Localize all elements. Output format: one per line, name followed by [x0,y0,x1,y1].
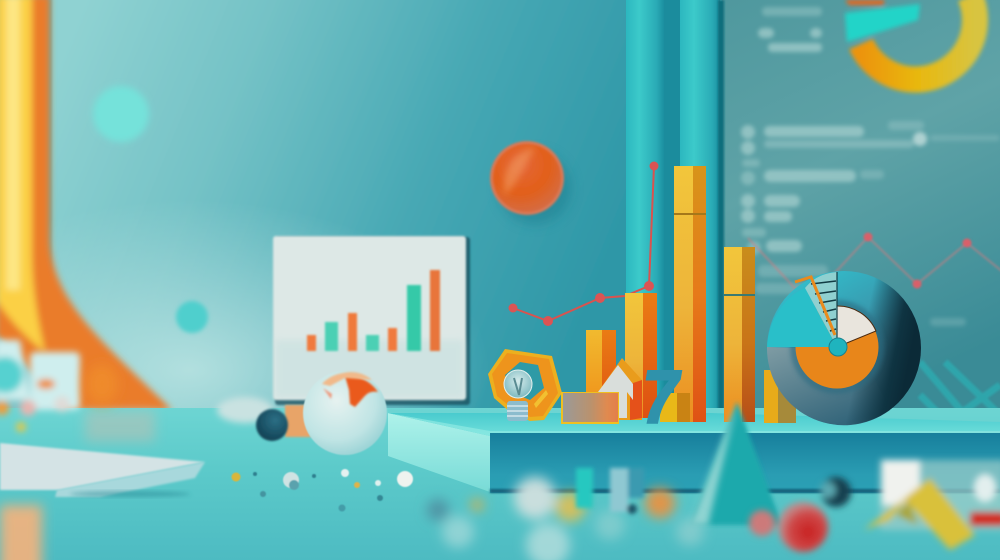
dark ball [256,409,288,441]
house arrow block [598,358,642,420]
blurred foreground card and tent [864,460,1000,550]
platform [388,413,1000,493]
platform top face [388,413,1000,436]
globe [303,371,387,455]
keyboard [0,443,205,497]
floor [0,408,1000,560]
lightbulb hexagon [488,349,562,421]
pillars [626,0,720,420]
orange block behind globe [285,405,311,437]
small block beside seven [660,393,690,422]
left far wall [0,0,70,420]
back wall [0,0,632,540]
blurred data panel [718,0,1000,430]
floating sphere: pale teal [93,86,149,142]
gauge lower grey ring [767,347,890,425]
platform side face [388,413,490,492]
floating sphere: orange [490,141,571,224]
number seven block: 7 [642,355,682,439]
foreground cone [690,402,782,525]
gauge dial [767,271,921,425]
floor reflection glows [0,410,155,560]
gauge hub [829,338,847,356]
bar chart on whiteboard [307,270,440,351]
bar: short [586,330,616,420]
blurred red spheres [749,477,851,552]
small floor beads [232,469,413,512]
teal diagonal graphic lower right [920,362,1000,425]
blurred orange blob on wall base [86,364,118,404]
gauge orange needle [795,277,835,335]
gauge white wedge [837,306,876,347]
blurred foreground blocks [576,468,644,514]
cloud behind dark ball [217,397,273,423]
gauge orange face [796,306,878,388]
gauge inset shadow [790,300,884,394]
platform front face [490,433,1000,493]
blurred foreground objects [427,477,704,560]
red line chart [508,162,658,326]
left blurred cups [0,340,80,432]
gradient box [561,392,619,424]
faint line chart on panel [748,232,1000,302]
floating sphere: small teal [176,301,208,333]
whiteboard chart [273,236,470,405]
donut chart on panel [845,0,975,79]
bar: small right [764,370,796,423]
blurred data rows [741,7,1000,326]
bar: tallest [674,166,706,422]
lightbulb [504,370,532,421]
bar: medium [625,293,657,418]
gauge teal wedge [767,288,837,347]
sculptural stripe: yellow and orange ribbon [0,0,172,410]
bar: second tallest [724,247,755,422]
gauge ladder section [805,272,837,347]
